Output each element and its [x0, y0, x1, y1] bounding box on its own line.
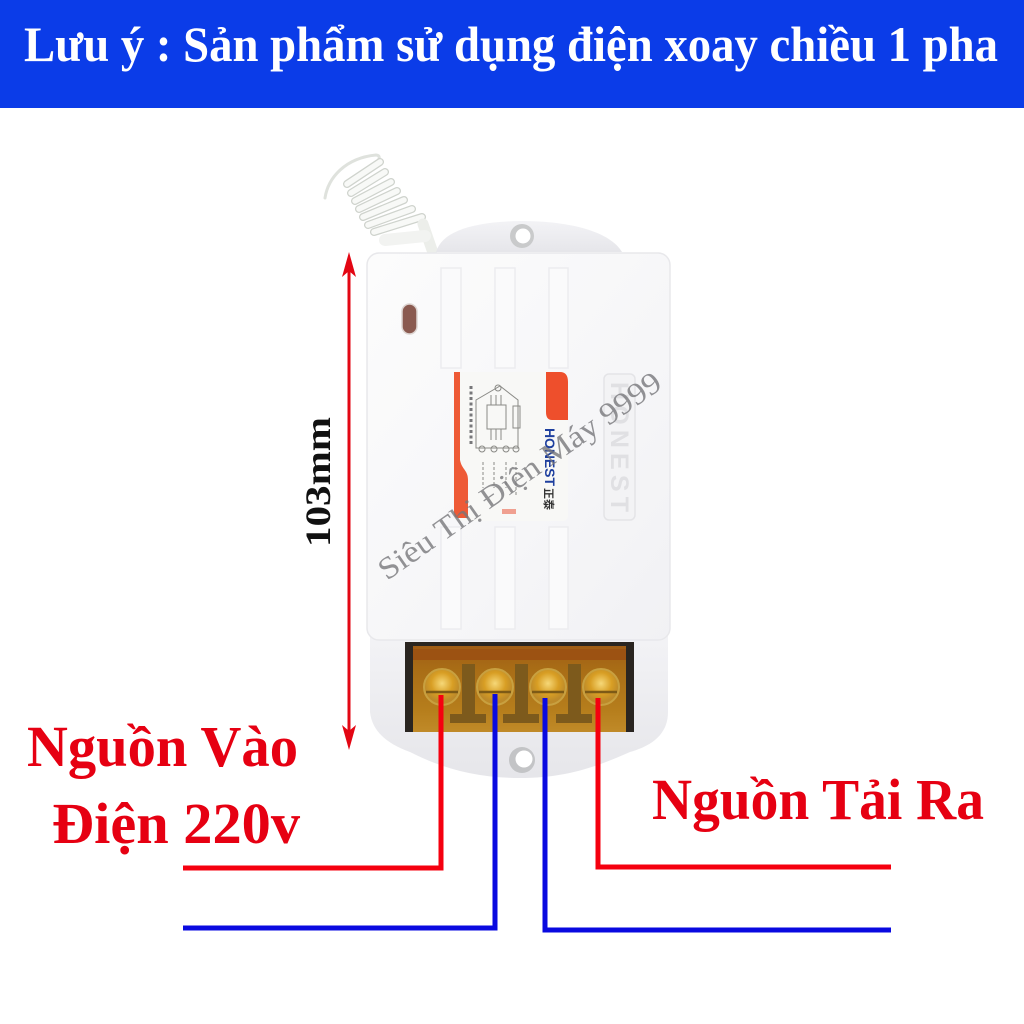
label: input power: Nguồn Vào	[27, 714, 298, 779]
watermark: Siêu Thị Điện Máy 9999	[371, 364, 668, 587]
wire: input live (red)	[183, 695, 441, 868]
label: input power	[27, 714, 300, 856]
icon: indicator LED	[402, 304, 417, 334]
label: output load: Nguồn Tải Ra	[652, 767, 984, 832]
title banner	[0, 0, 1024, 108]
terminal block	[405, 642, 634, 732]
product label: 正泰	[542, 488, 556, 510]
device base with mounting ears	[370, 221, 668, 778]
product label	[454, 372, 568, 521]
label: input power: Điện 220v	[52, 791, 300, 856]
wiring diagram on label	[476, 385, 520, 495]
dimension label: 103mm	[298, 417, 338, 547]
HONEST brand text on label: HONEST	[542, 428, 558, 486]
icon: coiled antenna	[325, 155, 432, 250]
embossed HONEST logo: HONEST	[605, 382, 633, 512]
wire: input neutral (blue)	[183, 694, 495, 928]
terminal screws	[424, 669, 619, 705]
wire: output neutral (blue)	[545, 698, 891, 930]
dimension arrow	[342, 252, 356, 750]
device front cover	[367, 253, 670, 640]
wire: output live (red)	[598, 698, 891, 867]
